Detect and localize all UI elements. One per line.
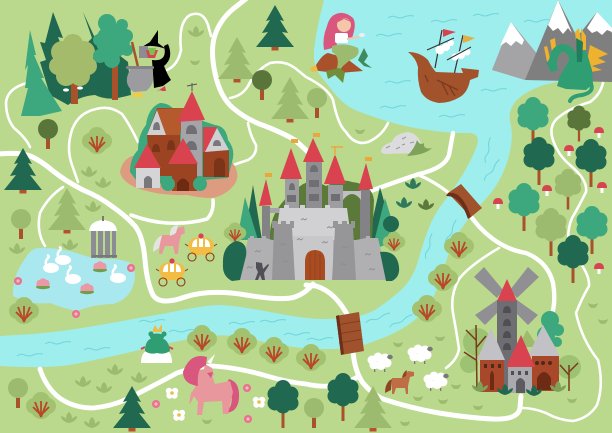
windmill: [474, 267, 539, 392]
unicorn: [183, 354, 239, 415]
white rocks and plant: [381, 132, 432, 156]
gazebo: [89, 216, 117, 258]
pink pony: [153, 225, 185, 254]
round trees: [8, 70, 327, 428]
red bushes: [9, 127, 474, 419]
mermaid on rock: [310, 13, 372, 83]
dark forest at witch's lair: [21, 12, 131, 116]
wooden bridge south: [336, 312, 364, 355]
frog prince: [141, 324, 173, 363]
wooden bridge east: [446, 184, 482, 219]
ship: [408, 29, 479, 103]
dragon: [544, 28, 608, 101]
water ripples: [17, 14, 550, 356]
pond: [13, 248, 135, 311]
palace with red roofs: [130, 83, 233, 191]
red bushes near castle: [224, 222, 405, 252]
castle walls: [240, 205, 388, 280]
water lilies: [36, 261, 107, 294]
right forest behind castle: [270, 181, 398, 250]
sheep: [368, 344, 449, 391]
brown horse: [385, 370, 414, 394]
green forest tree: [93, 14, 133, 100]
trees behind mill houses: [460, 311, 581, 391]
dark pines behind castle left: [237, 185, 262, 240]
golden carriages: [156, 233, 217, 286]
olive tree: [49, 34, 97, 104]
pine trees: [4, 5, 392, 432]
dark bush left of castle: [223, 241, 246, 281]
dark plants: [396, 178, 434, 210]
shadow creature: [255, 262, 269, 280]
flowers: [14, 264, 265, 423]
eyes in the forest: [63, 86, 83, 92]
mill houses: [472, 325, 566, 396]
mountains: [492, 0, 612, 82]
witch and cauldron: [126, 30, 171, 97]
dark bush right of castle: [380, 216, 399, 281]
swans: [43, 247, 126, 284]
palace grounds: [120, 156, 237, 198]
leafy trees: [268, 97, 608, 428]
castle upper towers: [259, 133, 373, 240]
mushrooms: [493, 127, 607, 274]
